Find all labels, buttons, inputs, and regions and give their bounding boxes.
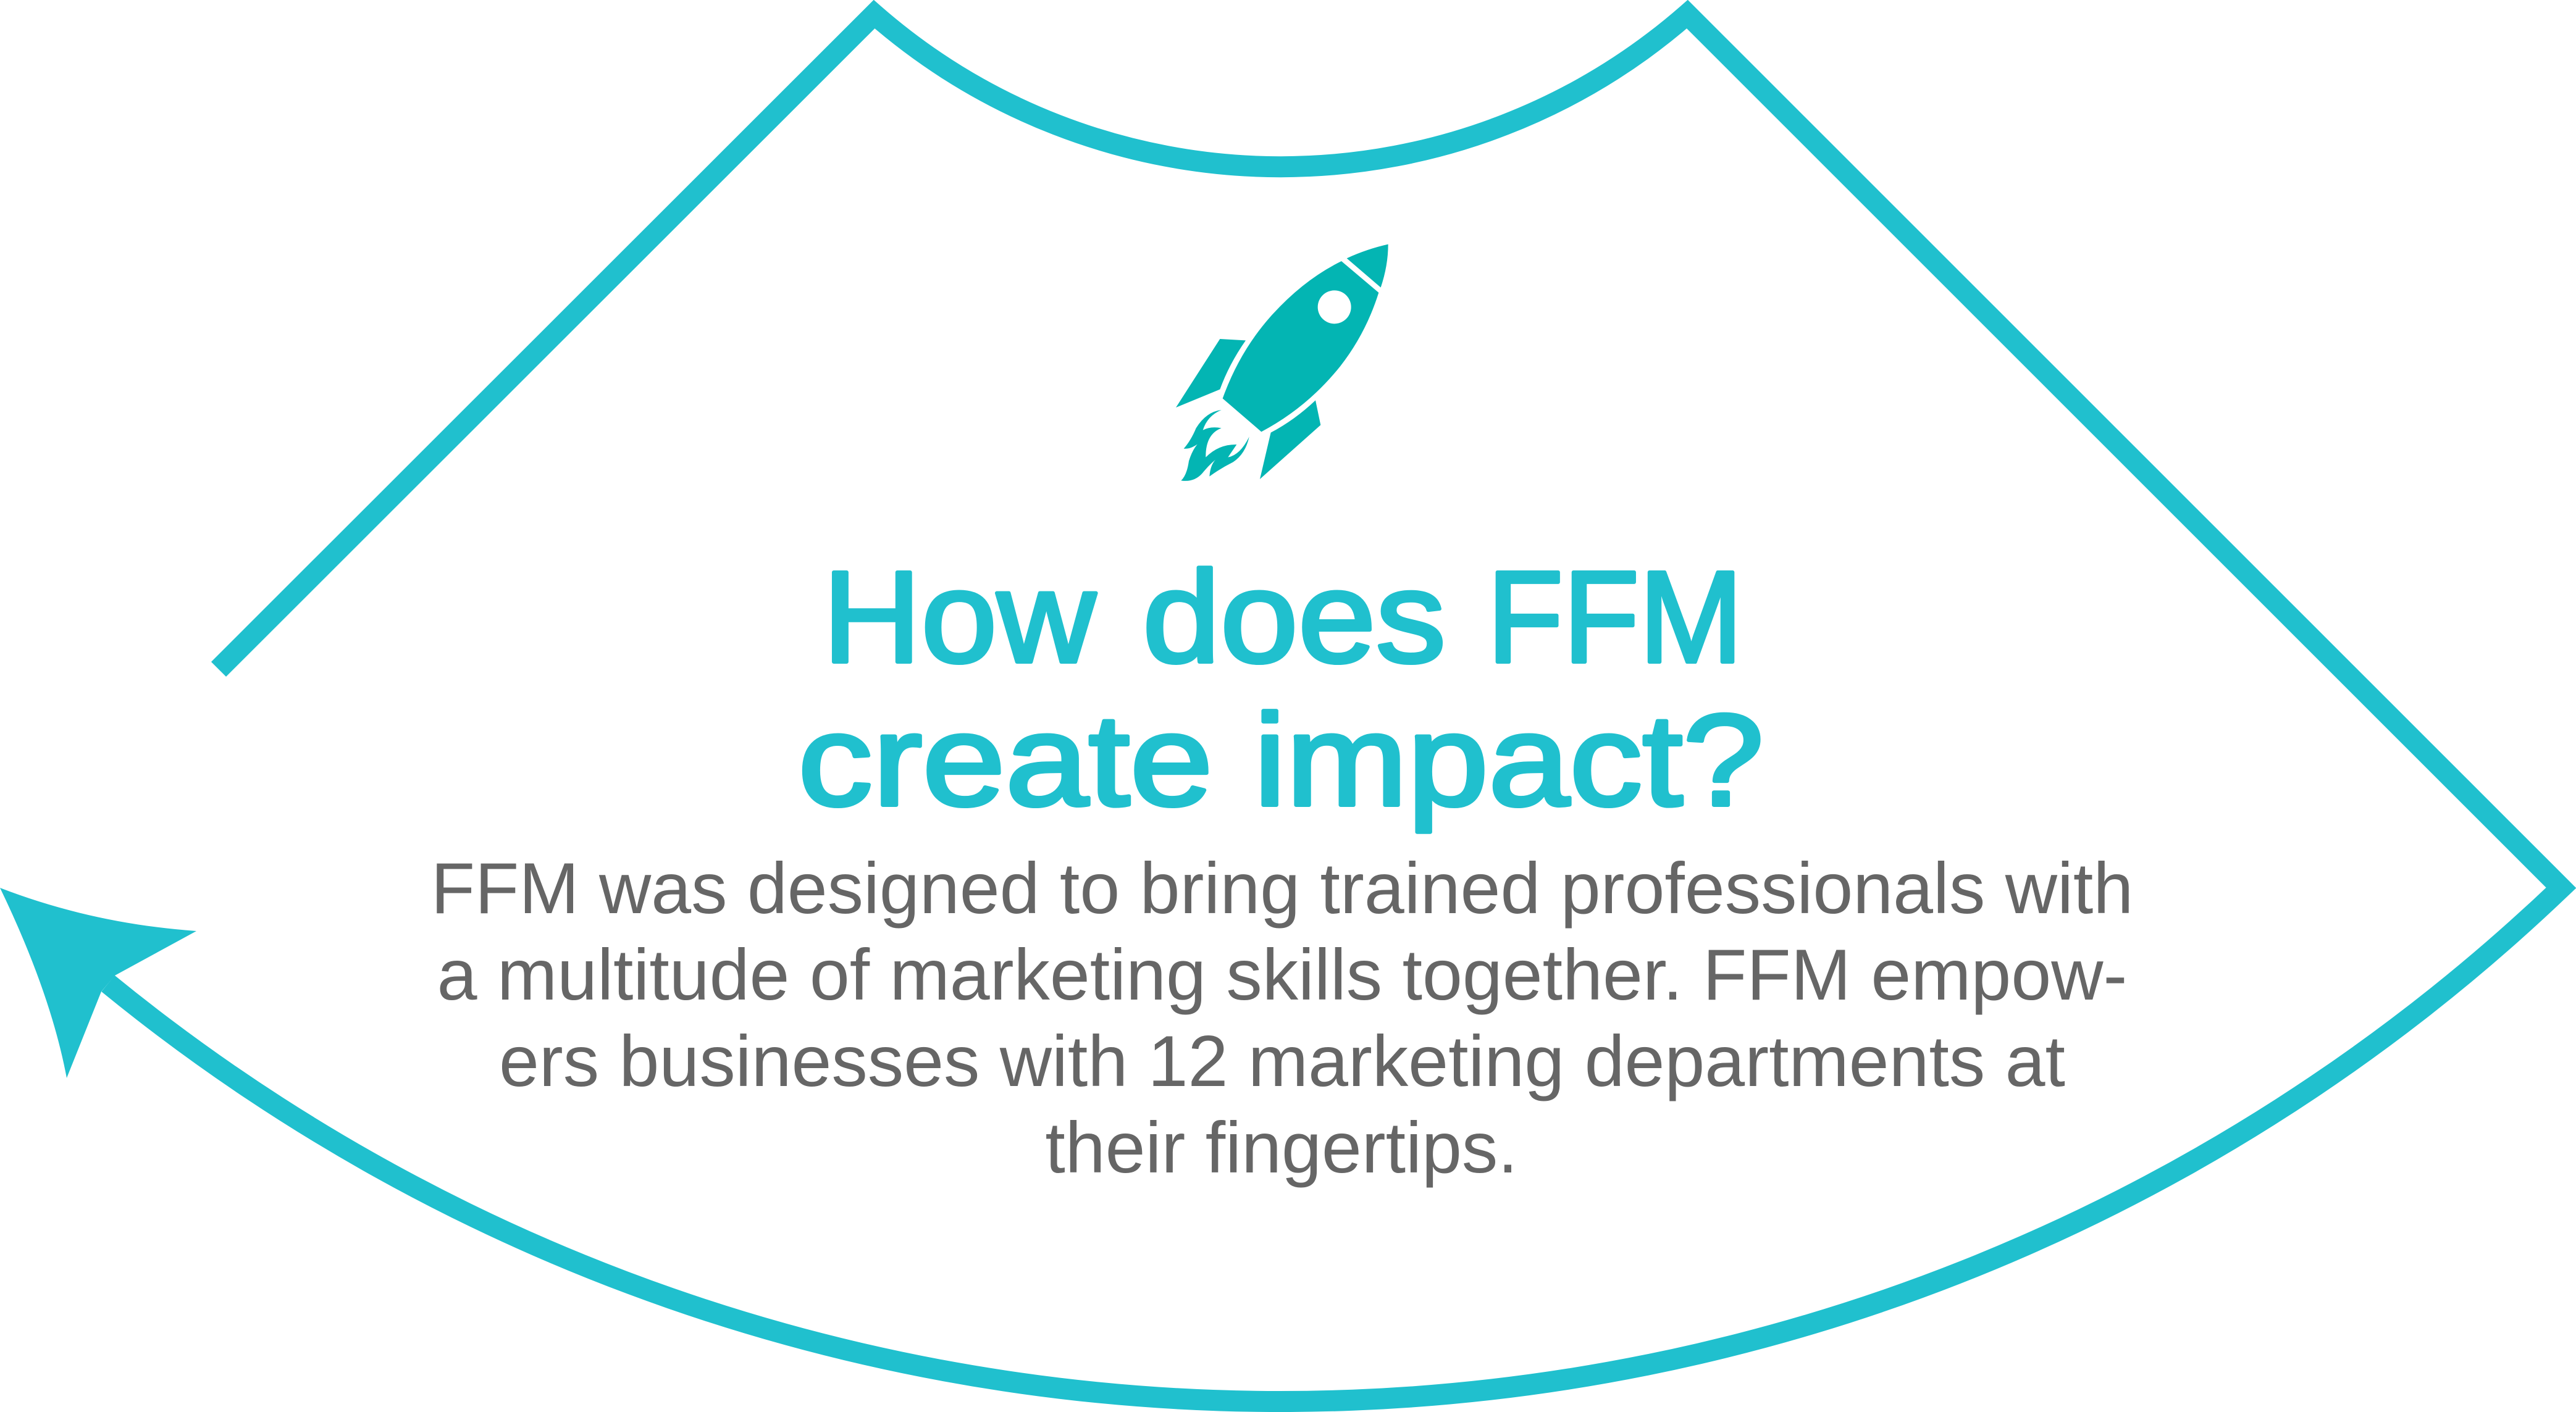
heading: does bbox=[1143, 544, 1446, 690]
body text: their fingertips. bbox=[1045, 1107, 1518, 1188]
rocket nose cone bbox=[1347, 244, 1388, 288]
rocket left fin bbox=[1176, 339, 1246, 407]
body text bbox=[431, 848, 2133, 1188]
icon: rocket bbox=[1176, 244, 1388, 481]
heading: impact? bbox=[1254, 687, 1764, 833]
heading: create bbox=[798, 687, 1213, 833]
heading: How bbox=[823, 544, 1096, 690]
heading bbox=[798, 544, 1764, 833]
rocket right fin bbox=[1260, 400, 1320, 479]
heading: FFM bbox=[1487, 544, 1743, 690]
body text: a multitude of marketing skills together. FFM empow- bbox=[437, 934, 2127, 1015]
arrowhead bbox=[0, 888, 196, 1078]
rocket window bbox=[1318, 290, 1351, 324]
rocket flame bbox=[1181, 410, 1249, 481]
rocket body bbox=[1223, 261, 1378, 432]
body text: FFM was designed to bring trained professionals with bbox=[431, 848, 2133, 929]
body text: ers businesses with 12 marketing departments at bbox=[499, 1021, 2065, 1101]
